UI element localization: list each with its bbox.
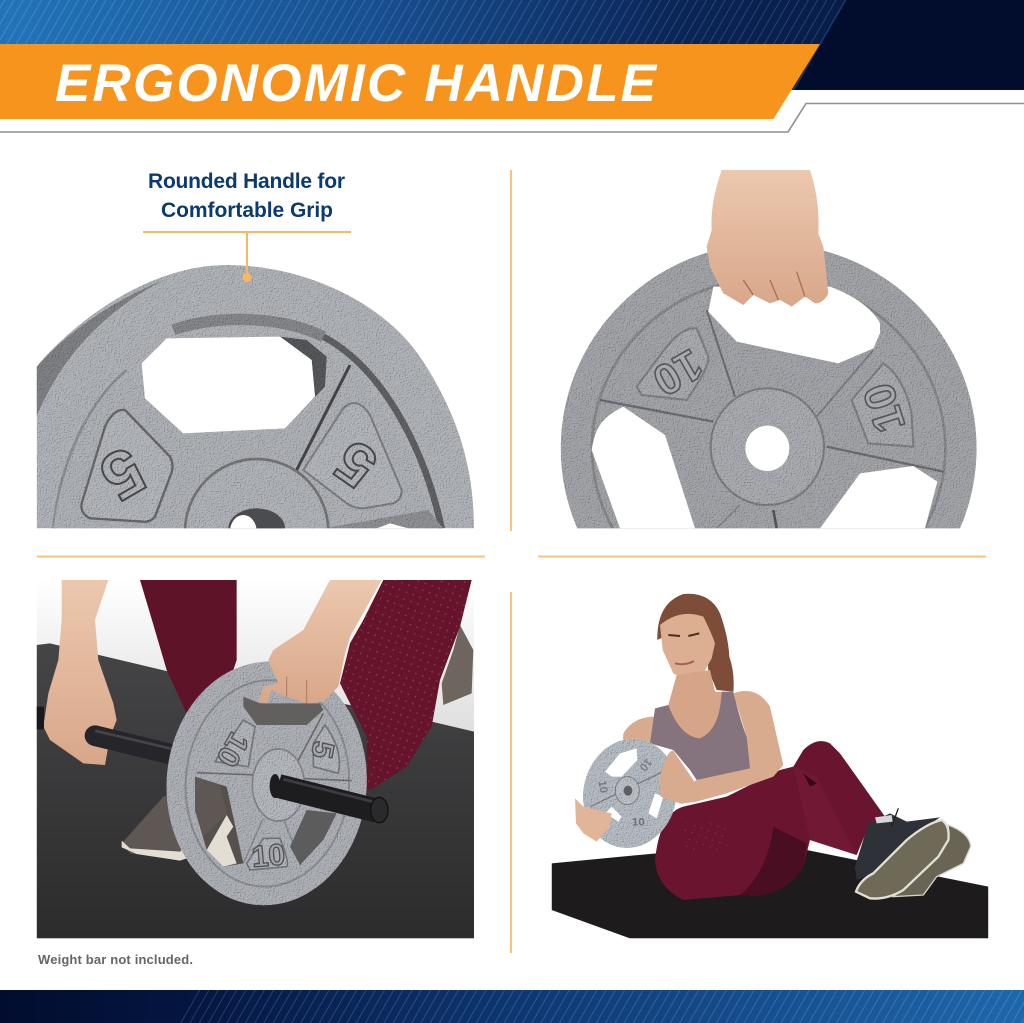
footer band	[0, 990, 1024, 1023]
handle opening	[142, 337, 315, 433]
left window	[592, 407, 695, 528]
header band	[0, 0, 1024, 132]
cast number 5, right: 5	[323, 427, 389, 501]
right window	[820, 466, 937, 528]
plate windows	[605, 748, 663, 822]
bar, left section	[37, 707, 177, 756]
cast number 10, left: 10	[210, 727, 255, 772]
handle opening	[708, 287, 880, 363]
right arm	[683, 691, 784, 804]
forearm behind plate	[610, 820, 626, 837]
woman: head and torso	[623, 614, 736, 742]
title: ERGONOMIC HANDLE	[55, 54, 658, 113]
panel: plate close-up with callout	[36, 172, 474, 528]
callout heading: Comfortable Grip	[161, 199, 333, 222]
floor mat	[552, 850, 988, 938]
cast number 5, right: 5	[304, 739, 340, 761]
footnote: Weight bar not included.	[38, 952, 193, 967]
panel: woman doing seated twist	[552, 594, 988, 938]
centre hole	[745, 426, 789, 471]
panel: hand gripping plate	[560, 170, 977, 528]
legs	[140, 580, 472, 790]
hair	[657, 594, 734, 692]
sports top	[650, 692, 753, 780]
shoes	[855, 808, 971, 899]
small plate	[573, 730, 687, 857]
left window	[195, 777, 243, 867]
plate centre hole	[624, 786, 632, 796]
cast number 10, left: 10	[595, 780, 609, 794]
cast number 10, left: 10	[645, 339, 710, 405]
bar, right section	[270, 774, 388, 823]
wall backdrop	[36, 618, 474, 746]
weight plate	[166, 662, 367, 906]
callout leader	[143, 232, 351, 282]
right arm and hand	[258, 580, 382, 703]
floor mat	[37, 643, 474, 938]
cast number 5, left: 5	[88, 432, 157, 515]
shoe under plate	[122, 796, 186, 861]
cast number 10, top: 10	[637, 756, 654, 773]
cast number 10, right: 10	[855, 377, 915, 438]
dividers	[37, 170, 986, 953]
lower window	[377, 523, 408, 528]
callout heading	[148, 170, 345, 222]
callout heading: Rounded Handle for	[148, 170, 345, 193]
plate close-up photo	[36, 265, 474, 528]
left hand	[575, 798, 612, 842]
panel: rolling plate on bar	[37, 579, 474, 938]
top window	[243, 697, 323, 725]
centre hole	[228, 508, 285, 528]
cast number 10, bottom: 10	[632, 817, 645, 829]
hand	[707, 170, 828, 307]
leggings	[655, 741, 885, 900]
right hand	[660, 751, 697, 804]
back shoe	[442, 625, 473, 705]
left arm and hand	[43, 580, 117, 765]
right window	[290, 810, 337, 865]
cast number 10, bottom: 10	[250, 838, 286, 874]
